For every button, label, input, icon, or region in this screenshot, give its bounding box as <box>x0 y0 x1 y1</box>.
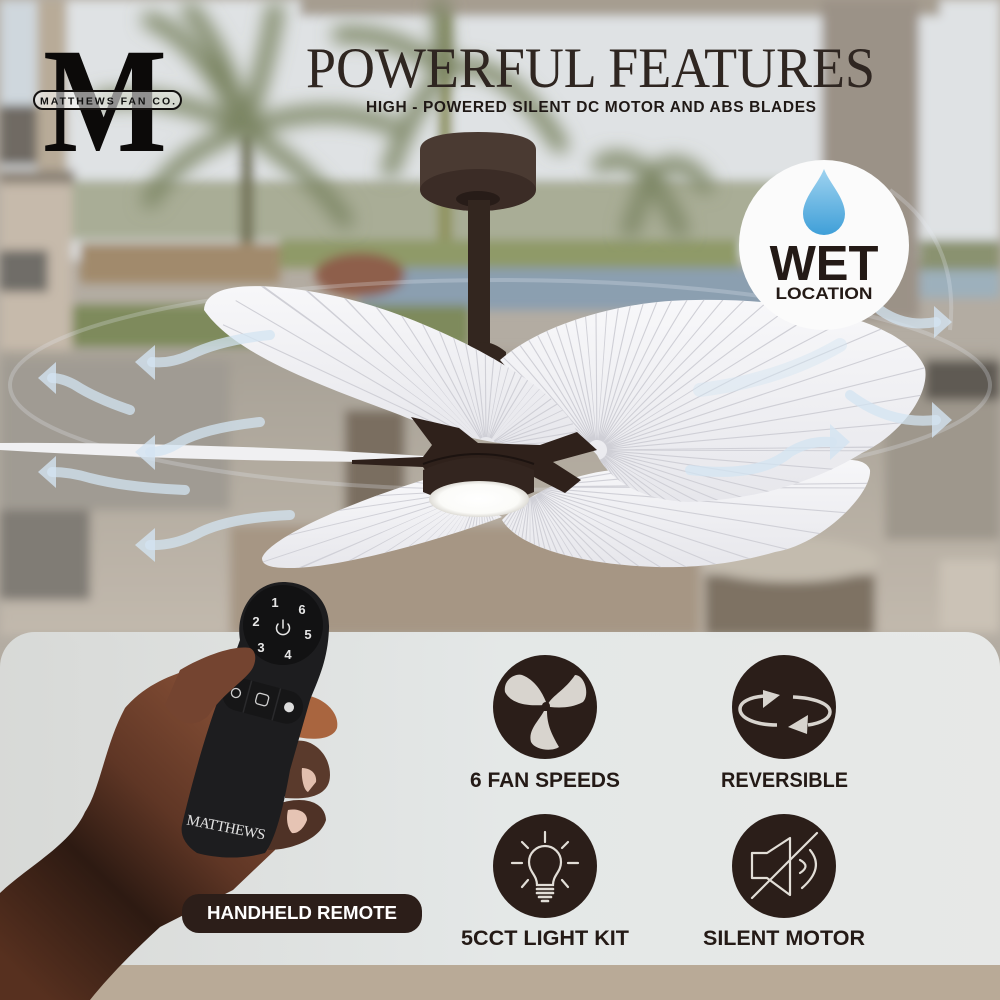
blade: upper right <box>500 300 926 502</box>
remote buttons: 6 <box>298 602 306 617</box>
blade: lower left <box>262 480 502 568</box>
lower control pill <box>219 674 307 727</box>
feature: 5cct light kit: 5CCT LIGHT KIT <box>461 927 629 950</box>
feature: 6 fan speeds: 6 FAN SPEEDS <box>470 769 620 792</box>
remote buttons: 4 <box>284 647 292 662</box>
feature: 5cct light kit <box>461 814 629 950</box>
icon: power <box>276 620 290 635</box>
feature: reversible <box>721 655 848 792</box>
remote buttons: 5 <box>304 627 312 642</box>
icon: water drop <box>803 169 845 235</box>
remote buttons: 3 <box>257 640 265 655</box>
label: handheld remote: HANDHELD REMOTE <box>207 903 397 923</box>
airflow arrows <box>38 306 952 562</box>
air flow swirl lines <box>10 190 990 490</box>
feature: silent motor: SILENT MOTOR <box>703 927 865 950</box>
feature: 6 fan speeds <box>470 655 620 792</box>
feature: reversible: REVERSIBLE <box>721 769 848 792</box>
fingers <box>268 695 337 850</box>
blade: lower right <box>502 460 870 568</box>
fan blades <box>0 270 935 667</box>
subtitle: HIGH - POWERED SILENT DC MOTOR AND ABS BLADES <box>366 99 816 116</box>
blade: far left thin <box>0 443 425 462</box>
logo: MATTHEWS FAN CO. <box>40 96 175 108</box>
label: handheld remote <box>182 894 422 933</box>
palm fronds <box>100 5 705 230</box>
thumb <box>165 647 255 723</box>
remote dial <box>243 585 323 665</box>
title: POWERFUL FEATURES <box>306 37 875 100</box>
remote wordmark: MATTHEWS <box>185 813 267 843</box>
fan motor and light <box>352 417 597 517</box>
arm and hand <box>0 668 290 1000</box>
remote buttons: 1 <box>271 595 279 610</box>
remote body <box>182 582 329 858</box>
panel: features <box>0 632 1000 965</box>
fan canopy and downrod <box>420 132 536 372</box>
remote buttons <box>252 595 312 662</box>
wet location badge <box>739 160 909 330</box>
logo: M <box>43 18 167 184</box>
remote buttons: 2 <box>252 614 260 629</box>
wet location badge: WET <box>770 237 878 291</box>
hand holding remote <box>0 582 337 1000</box>
blade: upper left <box>204 286 576 445</box>
wet location badge: LOCATION <box>776 284 872 303</box>
feature: silent motor <box>703 814 865 950</box>
